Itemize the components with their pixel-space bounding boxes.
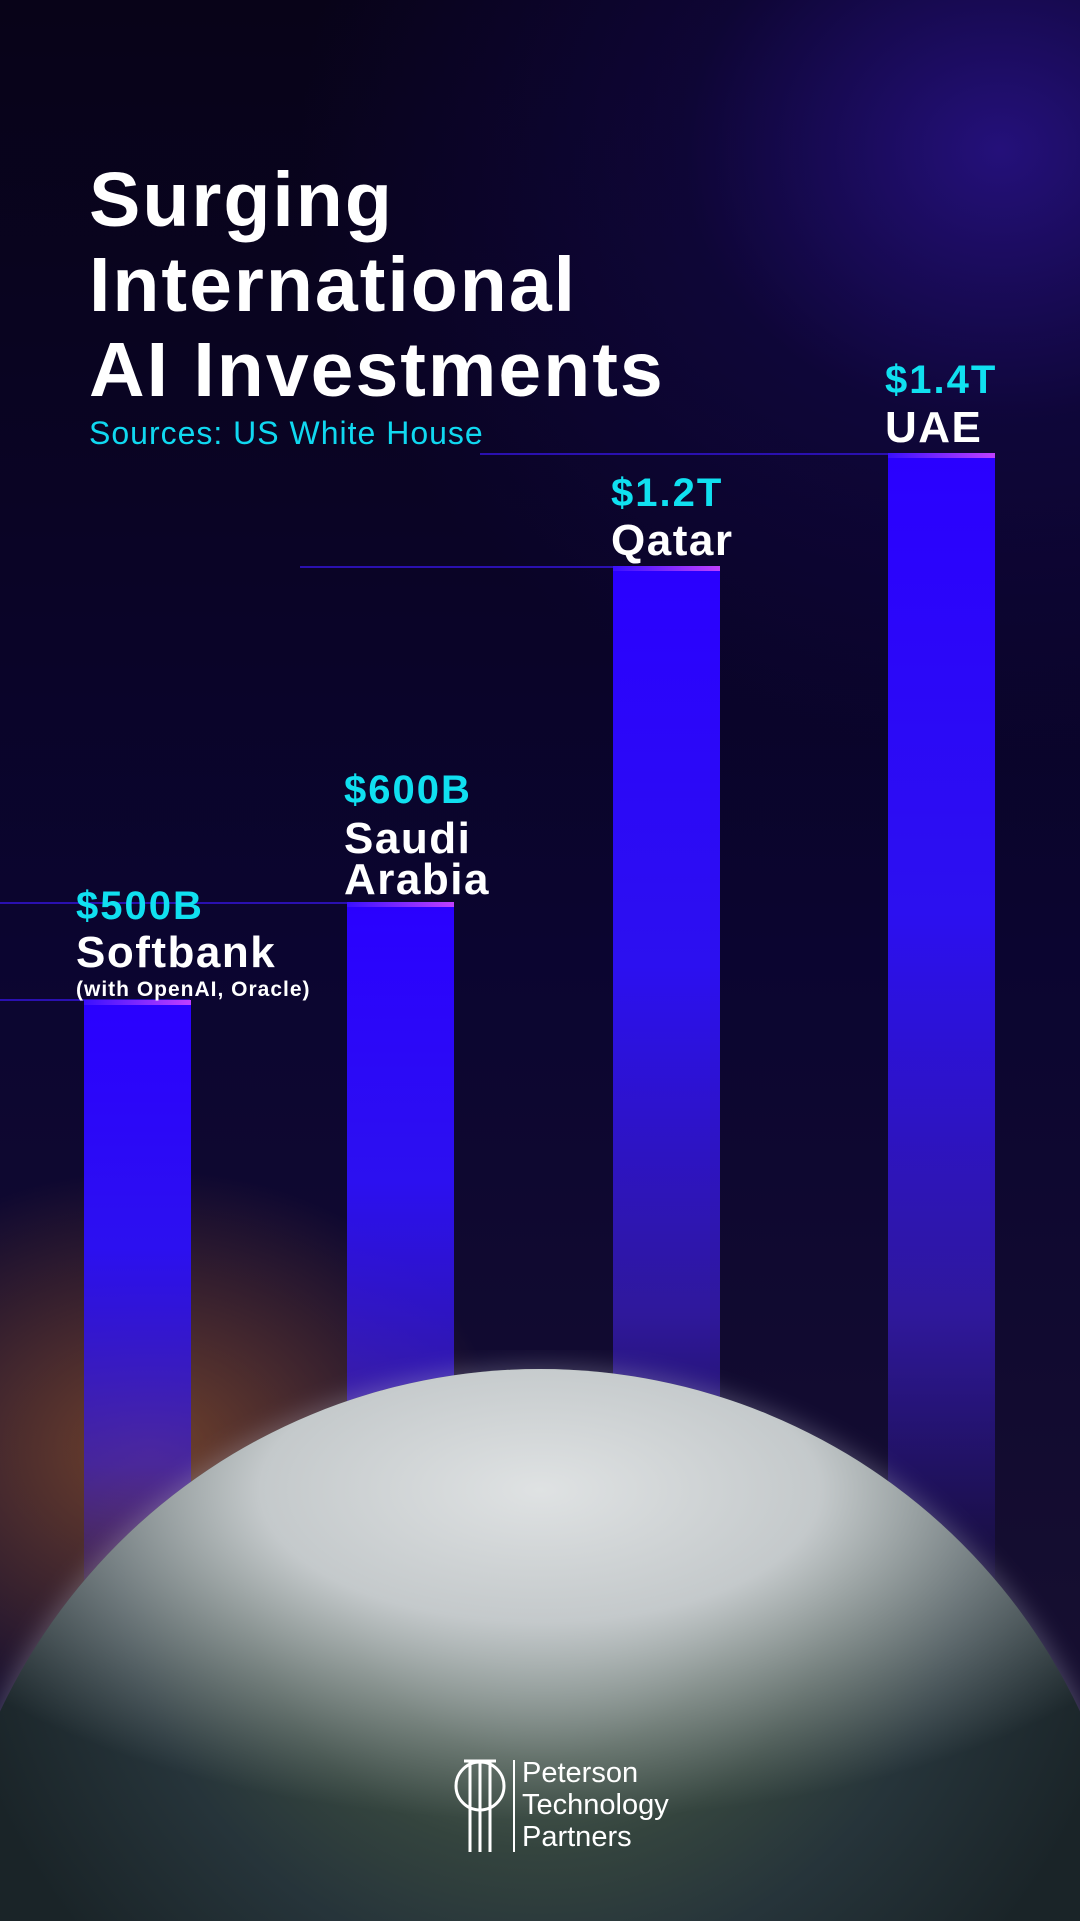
label: Softbank: $500B [76, 884, 204, 928]
bar: Saudi Arabia [347, 902, 454, 1602]
label: Softbank: (with OpenAI, Oracle) [76, 978, 311, 1001]
label: Saudi Arabia [344, 768, 490, 904]
label: Qatar [611, 471, 733, 565]
label: UAE: $1.4T [885, 358, 997, 402]
label: Saudi Arabia: Arabia [344, 855, 490, 904]
globe [0, 1354, 1080, 1921]
logo: Technology [522, 1789, 669, 1821]
bar: Softbank [84, 1000, 191, 1620]
title: Surging [89, 157, 394, 243]
label: Qatar: Qatar [611, 516, 733, 565]
label: Saudi Arabia: Saudi [344, 814, 471, 863]
title: International [89, 242, 577, 328]
label: UAE [885, 358, 997, 452]
logo: Partners [522, 1821, 632, 1853]
logo: Peterson [522, 1757, 638, 1789]
sources: Sources: US White House [89, 415, 484, 451]
title: AI Investments [89, 327, 665, 413]
bar: Qatar [613, 566, 720, 1566]
label: Saudi Arabia: $600B [344, 768, 472, 812]
bar: UAE [888, 453, 995, 1603]
label: Softbank [76, 884, 311, 1001]
label: UAE: UAE [885, 403, 982, 452]
icon: logo mark [454, 1760, 506, 1852]
label: Softbank: Softbank [76, 928, 276, 977]
title [89, 157, 665, 413]
label: Qatar: $1.2T [611, 471, 723, 515]
logo [454, 1757, 669, 1853]
